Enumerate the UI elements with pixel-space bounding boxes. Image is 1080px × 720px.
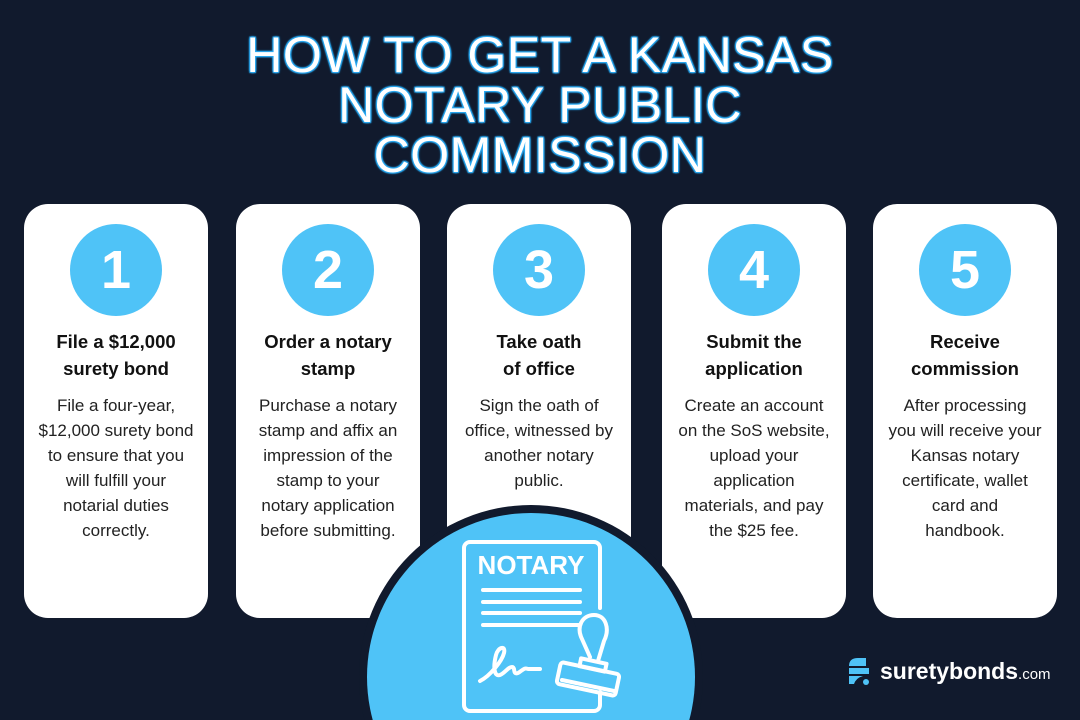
number 5: 5: [950, 240, 980, 300]
text 5: Kansas notary: [911, 446, 1019, 465]
heading 1: File a $12,000: [56, 331, 176, 352]
heading 3: Take oath: [496, 331, 581, 352]
text 2: notary application: [261, 496, 395, 515]
logo icon: [849, 658, 869, 685]
text 3: office, witnessed by: [465, 421, 613, 440]
heading 3: [496, 331, 581, 379]
text 5: After processing: [904, 396, 1026, 415]
text 1: [38, 396, 194, 540]
title: HOW TO GET A KANSAS: [246, 27, 834, 83]
heading 5: commission: [911, 358, 1019, 379]
title: COMMISSION: [374, 127, 706, 183]
text 2: impression of the: [263, 446, 393, 465]
heading 3: of office: [503, 358, 575, 379]
heading 4: [705, 331, 803, 379]
number 2: [282, 224, 374, 316]
heading 2: Order a notary: [264, 331, 392, 352]
text 3: public.: [514, 471, 564, 490]
logo text: suretybonds.com: [880, 658, 1051, 684]
card 4: [662, 204, 846, 618]
icon: notary document with stamp: [464, 542, 620, 711]
text 5: [888, 396, 1042, 540]
text 1: notarial duties: [63, 496, 169, 515]
text 3: Sign the oath of: [479, 396, 599, 415]
card 1: [24, 204, 208, 618]
title: [246, 27, 834, 183]
text 1: will fulfill your: [66, 471, 166, 490]
text 5: card and: [932, 496, 998, 515]
text 3: another notary: [484, 446, 594, 465]
text 1: File a four-year,: [57, 396, 175, 415]
text 1: $12,000 surety bond: [38, 421, 194, 440]
text 2: stamp to your: [276, 471, 380, 490]
text 4: [678, 396, 830, 540]
heading 4: Submit the: [706, 331, 802, 352]
text 4: application: [713, 471, 795, 490]
card 5: [873, 204, 1057, 618]
text 5: you will receive your: [888, 421, 1042, 440]
text 2: before submitting.: [260, 521, 396, 540]
text 4: Create an account: [685, 396, 823, 415]
text 4: materials, and pay: [685, 496, 823, 515]
text 4: on the SoS website,: [678, 421, 830, 440]
text 3: [465, 396, 613, 490]
text 1: to ensure that you: [48, 446, 184, 465]
number 4: [708, 224, 800, 316]
number 3: 3: [524, 240, 554, 300]
number 4: 4: [739, 240, 769, 300]
number 3: [493, 224, 585, 316]
heading 5: Receive: [930, 331, 1000, 352]
text 2: [259, 396, 397, 540]
text 4: upload your: [710, 446, 798, 465]
heading 5: [911, 331, 1019, 379]
text 5: handbook.: [925, 521, 1005, 540]
number 1: [70, 224, 162, 316]
heading 4: application: [705, 358, 803, 379]
notary icon circle: NOTARY: [478, 550, 584, 580]
text 2: Purchase a notary: [259, 396, 397, 415]
heading 2: stamp: [301, 358, 355, 379]
text 2: stamp and affix an: [259, 421, 397, 440]
number 5: [919, 224, 1011, 316]
number 1: 1: [101, 240, 131, 300]
text 5: certificate, wallet: [902, 471, 1028, 490]
text 4: the $25 fee.: [709, 521, 799, 540]
heading 1: [56, 331, 176, 379]
heading 1: surety bond: [63, 358, 169, 379]
card 2: [236, 204, 420, 618]
card 3: [447, 204, 631, 618]
title: NOTARY PUBLIC: [338, 77, 742, 133]
number 2: 2: [313, 240, 343, 300]
heading 2: [264, 331, 392, 379]
logo: [849, 658, 1051, 685]
text 1: correctly.: [82, 521, 150, 540]
